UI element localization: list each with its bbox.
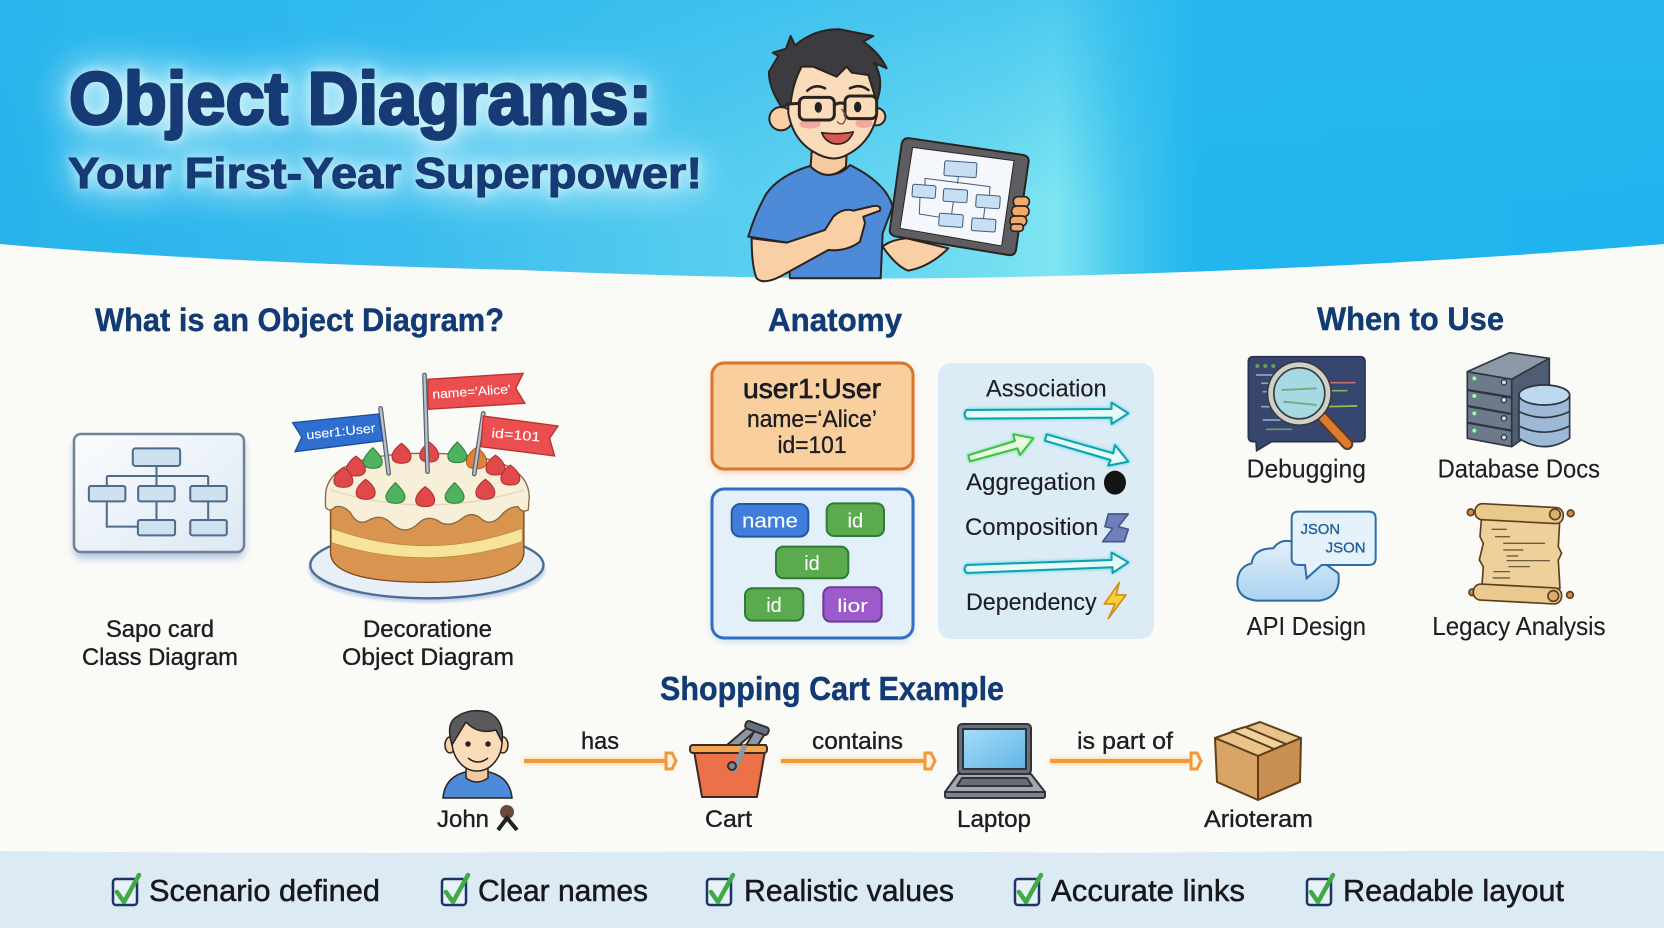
label: legacy analysis: Legacy Analysis <box>1432 611 1606 641</box>
chip: name <box>732 504 808 537</box>
heading: Anatomy: Anatomy <box>768 302 902 338</box>
title: Your First-Year Superpower! <box>68 149 702 198</box>
panel: object box: user1:User <box>743 373 881 404</box>
chip: id <box>776 547 848 578</box>
link: association <box>965 376 1128 424</box>
neck <box>811 152 847 175</box>
chip: lior: lior <box>837 595 868 616</box>
object: John <box>443 711 512 798</box>
label: debugging: Debugging <box>1247 453 1366 483</box>
chip: id <box>745 588 803 621</box>
title <box>68 57 702 198</box>
arrow: has <box>524 728 676 769</box>
label: class diagram <box>82 616 238 671</box>
panel: object box <box>712 363 913 472</box>
heading: Shopping Cart Example: Shopping Cart Example <box>660 670 1004 707</box>
nose <box>837 109 845 124</box>
chip: id: id <box>804 553 820 575</box>
label: John: John <box>437 806 489 833</box>
eyes <box>815 102 822 113</box>
label: Laptop: Laptop <box>957 806 1031 833</box>
arrow: green <box>968 434 1033 461</box>
face <box>788 60 877 158</box>
link: dependency <box>966 583 1126 619</box>
arrow: contains <box>781 728 935 769</box>
check: accurate links: Accurate links <box>1051 873 1245 908</box>
arrow: teal <box>1045 434 1128 466</box>
link: composition: Composition <box>965 514 1098 541</box>
object: cart <box>690 720 770 797</box>
icon: api cloud: JSON <box>1326 540 1366 556</box>
icon: debugging <box>1248 357 1365 451</box>
lower tablet hand <box>883 238 948 271</box>
label: class diagram: Class Diagram <box>82 644 238 671</box>
pointing arm <box>752 206 880 281</box>
flag: blue: user1:User <box>306 420 377 442</box>
link: dependency: Dependency <box>966 589 1097 616</box>
illustration: student holding tablet <box>748 29 1029 281</box>
arrow: has: has <box>581 728 619 755</box>
arrow: is part of: is part of <box>1077 728 1173 755</box>
use cases <box>1237 353 1606 641</box>
panel: object box: id=101 <box>778 432 846 459</box>
chip: name: name <box>742 510 798 532</box>
label: object diagram: Object Diagram <box>342 644 514 671</box>
check: clear names: Clear names <box>478 873 648 908</box>
ears <box>769 107 793 130</box>
object: box <box>1215 722 1301 800</box>
icon: api cloud <box>1237 512 1376 601</box>
icon: legacy scroll <box>1467 503 1574 604</box>
illustration: decorated cake <box>293 373 558 603</box>
label: box: Arioteram <box>1204 806 1313 833</box>
arrow: contains: contains <box>812 728 903 755</box>
check: scenario defined: Scenario defined <box>149 873 380 908</box>
glasses <box>787 96 877 120</box>
footer checklist <box>0 851 1664 928</box>
panel: object box: name=‘Alice’ <box>747 406 877 433</box>
arrow: teal lower <box>965 553 1128 573</box>
flag: red id <box>481 416 558 456</box>
fingers <box>1010 197 1029 231</box>
shopping cart flow <box>437 711 1313 833</box>
tablet <box>890 138 1029 255</box>
flag: blue <box>293 414 383 452</box>
panel: link types <box>938 363 1154 639</box>
icon: database <box>1467 353 1570 447</box>
tablet diagram <box>912 161 1000 232</box>
eyebrows <box>807 86 868 91</box>
object: laptop <box>945 724 1045 798</box>
check: readable layout: Readable layout <box>1343 873 1564 908</box>
title: Object Diagrams: <box>69 57 652 140</box>
label: database docs: Database Docs <box>1438 453 1600 483</box>
label: object diagram: Decoratione <box>363 616 492 643</box>
hair <box>769 29 887 107</box>
label: class diagram: Sapo card <box>106 616 214 643</box>
heading: When to Use: When to Use <box>1317 301 1504 337</box>
label: object diagram <box>342 616 514 671</box>
link: aggregation: Aggregation <box>966 469 1096 496</box>
icon: api cloud: JSON <box>1301 522 1340 538</box>
label: John <box>437 805 517 833</box>
chip: id: id <box>766 595 782 617</box>
cheeks <box>799 119 821 129</box>
chip: lior <box>823 587 882 622</box>
chip: id: id <box>848 510 863 532</box>
shirt <box>748 165 893 278</box>
flag: red id: id=101 <box>491 425 541 445</box>
panel: class diagram card <box>74 434 244 558</box>
flag: red name <box>428 373 525 409</box>
header banner <box>0 0 1664 300</box>
flag: red name: name='Alice' <box>432 381 511 402</box>
heading: What is an Object Diagram?: What is an Object Diagram? <box>95 302 504 338</box>
panel: attribute chips <box>712 489 913 641</box>
chip: id <box>827 503 884 536</box>
label: Cart: Cart <box>705 806 752 833</box>
link: association: Association <box>986 376 1107 403</box>
berries <box>334 442 520 507</box>
mouth <box>822 132 853 144</box>
poles <box>381 375 483 474</box>
check: realistic values: Realistic values <box>744 873 954 908</box>
arrow: is part of <box>1050 728 1201 769</box>
label: api design: API Design <box>1247 611 1366 641</box>
